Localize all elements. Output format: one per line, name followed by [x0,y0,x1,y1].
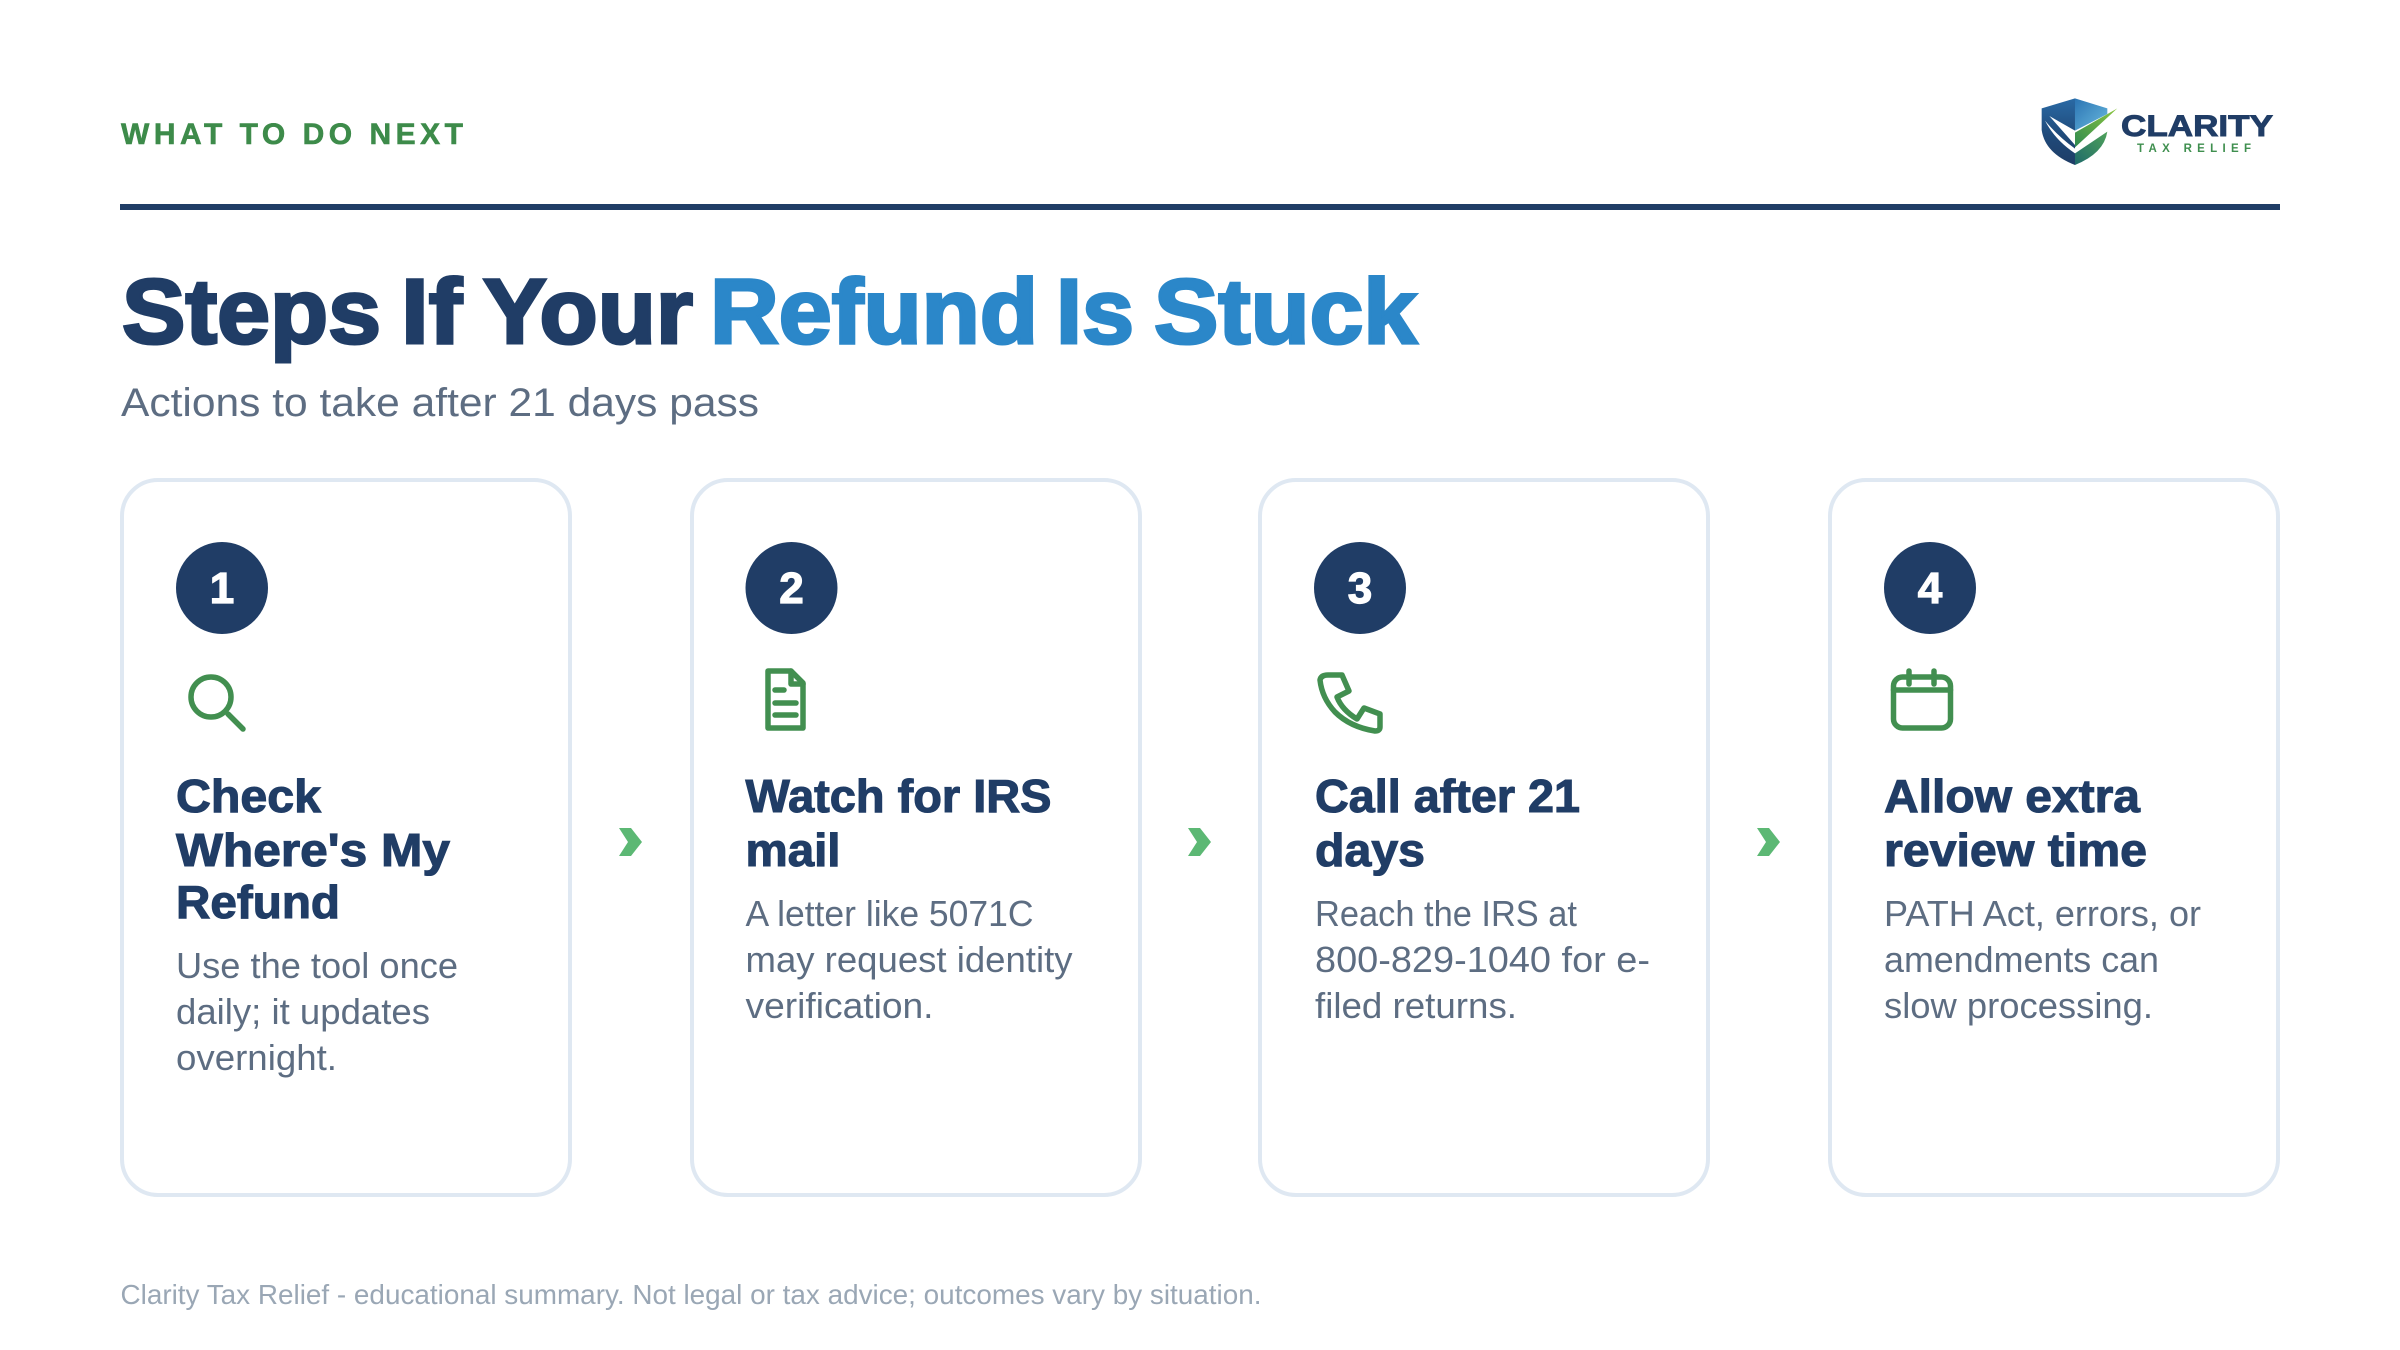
footer disclaimer: Clarity Tax Relief - educational summary. Not legal or tax advice; outcomes vary by situation. [120,1279,1262,1310]
step 4 body: PATH Act, errors, or [1884,893,2201,934]
step number 4 [1884,542,1976,634]
step number 1: 1 [210,564,234,613]
title: If [401,261,462,363]
arrow 3 to 4 [1757,828,1780,856]
step 3 body [1315,893,1650,1026]
step 2 body: verification. [746,985,934,1026]
title: Your [483,261,693,363]
step number 3: 3 [1348,564,1372,613]
panel: step 2 [692,480,1140,1195]
icon: calendar [1894,671,1950,728]
logo tagline: TAX RELIEF [2137,143,2251,155]
step 2 body: may request identity [746,939,1072,980]
subtitle: Actions to take after 21 days pass [121,381,759,425]
eyebrow heading: WHAT TO DO NEXT [121,118,463,151]
step 1 body: Use the tool once [176,945,458,986]
step 3 heading: days [1315,824,1425,876]
step 2 body [746,893,1072,1026]
step 3 body: 800-829-1040 for e- [1315,939,1650,980]
panel: step 1 [122,480,570,1195]
logo wordmark: CLARITY [2121,110,2273,143]
step 4 body [1884,893,2201,1026]
title [122,261,1418,363]
panel: step 4 [1830,480,2278,1195]
step 2 heading [746,770,1052,876]
step 1 heading: Refund [176,876,340,928]
step 2 heading: Watch for IRS [746,770,1052,822]
title: Steps [122,261,381,363]
arrow 1 to 2 [619,828,642,856]
step number 3 [1314,542,1406,634]
panel: step 3 [1260,480,1708,1195]
step 3 body: filed returns. [1315,985,1517,1026]
step number 1 [176,542,268,634]
icon: phone [1320,675,1380,731]
step 4 heading [1884,770,2147,876]
title: Refund [710,261,1038,363]
icon: shield with check [2042,98,2117,165]
step 2 heading: mail [746,824,840,876]
step number 2: 2 [779,564,804,613]
arrow 2 to 3 [1188,828,1211,856]
title: Stuck [1154,261,1418,363]
step 2 body: A letter like 5071C [746,893,1034,934]
title: Is [1056,261,1134,363]
step number 4: 4 [1918,564,1943,613]
step 1 heading: Where's My [176,824,450,876]
step 3 heading [1315,770,1580,876]
icon: magnifying glass [191,677,243,729]
step 1 heading: Check [176,770,321,822]
step 3 body: Reach the IRS at [1315,893,1577,934]
step 4 heading: review time [1884,824,2147,876]
step 1 heading [176,770,450,928]
step number 2 [746,542,838,634]
step 1 body [176,945,458,1078]
step 4 heading: Allow extra [1884,770,2140,822]
step 1 body: overnight. [176,1037,337,1078]
step 3 heading: Call after 21 [1315,770,1580,822]
step 4 body: slow processing. [1884,985,2153,1026]
icon: document [768,671,803,728]
step 1 body: daily; it updates [176,991,430,1032]
step 4 body: amendments can [1884,939,2159,980]
header rule [120,204,2280,210]
logo: Clarity Tax Relief [2042,98,2273,165]
